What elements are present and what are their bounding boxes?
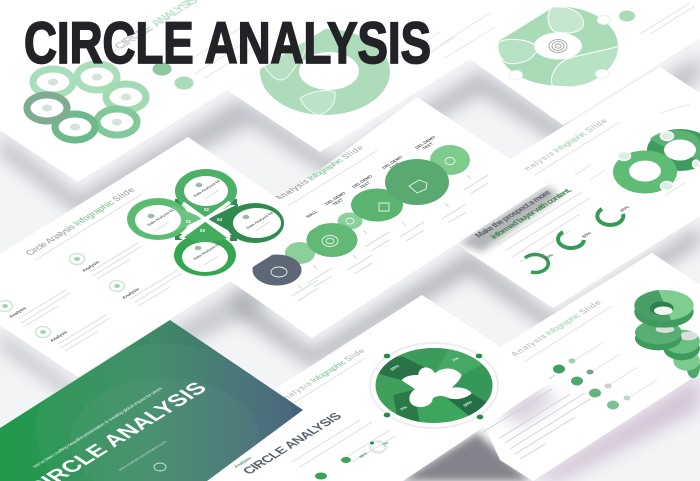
column labels: TEXT [331, 197, 345, 206]
numbers: 03 [200, 228, 206, 233]
donut stats [525, 209, 623, 273]
percentages: 30% [389, 364, 400, 372]
bold statement: informed buyer with content. [488, 187, 574, 240]
slide: clover [200, 295, 552, 481]
analysis list items [0, 243, 182, 351]
numbers: 02 [204, 207, 210, 212]
column labels [305, 135, 441, 219]
heading: nalysis [281, 380, 314, 401]
heading [272, 143, 366, 202]
teardrops [186, 198, 228, 217]
heading: Infographic [542, 311, 583, 337]
bold statement: Make the prospect a more [473, 189, 553, 239]
icon: fingerprint [549, 40, 567, 52]
shadow patch [495, 388, 560, 425]
heading [521, 117, 610, 172]
slide: four circles [0, 137, 318, 377]
ring chart [498, 6, 635, 87]
four circle diagram [127, 169, 284, 276]
small bullets [152, 62, 194, 90]
column labels: DEL DEMO [324, 191, 347, 206]
icons in rings [42, 74, 131, 130]
heading: Slide [342, 347, 367, 363]
heading: Infographic [308, 359, 348, 384]
heading: Infographic [305, 156, 345, 182]
stat labels [543, 205, 630, 261]
mini stats [315, 442, 386, 480]
ring chart [27, 64, 146, 140]
text lines [292, 420, 395, 467]
heading: nalysis [521, 150, 557, 172]
circle captions [147, 180, 275, 261]
heading: Analysis [508, 333, 549, 358]
percentages: 30% [462, 400, 473, 408]
ring dots [384, 354, 483, 419]
small label: Analysis [233, 456, 253, 469]
title: CIRCLE ANALYSIS [24, 11, 431, 76]
column labels: TEXT [358, 180, 372, 189]
leader lines and captions [298, 175, 471, 289]
percentages: 7% [451, 356, 460, 363]
numbered dots [553, 364, 619, 410]
3d disc stack [634, 290, 700, 378]
heading: Slide [339, 143, 366, 161]
circle captions: Data Analysis 02 [193, 180, 221, 198]
slide: clover: 7% [381, 441, 390, 447]
slide: top left six rings [0, 0, 372, 182]
donut chart [260, 29, 390, 115]
slide: right figure eight [416, 67, 700, 308]
heading: Slide [110, 186, 137, 203]
column labels: WALL [305, 209, 319, 219]
connectors [175, 199, 237, 241]
outer ring [370, 343, 498, 428]
heading: Slide [583, 117, 610, 134]
stat labels: 85% [543, 253, 554, 261]
stat labels: 85% [619, 205, 630, 213]
column labels: TEXT [421, 141, 435, 150]
circle captions: Data Analysis 04 [246, 211, 275, 230]
slide: centre overlapping circles [200, 97, 548, 338]
numbers: 01 [186, 219, 192, 224]
heading: circle analysis: CIRCLE [111, 23, 157, 52]
decorative circles [70, 378, 260, 481]
shadow from centre slide [458, 186, 560, 252]
heading: Infographic [71, 198, 117, 227]
slide: top center donut [227, 0, 565, 152]
numbers: 04 [217, 217, 223, 222]
column labels: DEL DEMO [351, 174, 374, 189]
cover slide [0, 320, 303, 481]
numbers [186, 207, 223, 233]
text lines [88, 22, 262, 78]
analysis list items: Analysis [49, 330, 69, 343]
heading [23, 186, 137, 257]
heading: Slide [576, 298, 604, 316]
column labels: TEXT [388, 161, 402, 170]
clover centre [402, 367, 472, 407]
cover icon [154, 463, 166, 471]
slide: top right segmented ring [440, 0, 700, 125]
heading: Circle Analysis [23, 223, 78, 257]
heading [281, 347, 367, 401]
circles [252, 145, 470, 286]
heading: Infographic [550, 130, 589, 154]
slide: bottom right disc stack [460, 253, 700, 481]
column labels: DEL DEMO [381, 155, 404, 170]
slide: clover: 85% [358, 451, 369, 459]
cover subline: www.example-presentation.com [118, 440, 168, 472]
heading [508, 298, 604, 358]
circle captions: Data Analysis 03 [193, 243, 221, 261]
circle icons [271, 158, 455, 277]
percentages: 7% [399, 405, 408, 412]
bold title: CIRCLE ANALYSIS [239, 410, 345, 477]
analysis list items: Analysis [8, 306, 28, 319]
icons [568, 358, 630, 400]
text lines [440, 3, 695, 34]
clover chart [376, 347, 497, 427]
figure eight rings [613, 129, 700, 194]
column labels: DEL DEMO [414, 135, 437, 150]
cover tagline: We've been crafting beautiful presentation & creating global impact for years [32, 386, 165, 469]
analysis list items: Analysis [121, 287, 141, 300]
analysis list items: Analysis [81, 260, 101, 273]
heading: circle analysis [111, 0, 202, 52]
percentages [389, 356, 473, 412]
heading: Analysis [272, 178, 311, 202]
stat labels: 85% [581, 231, 592, 239]
circle captions: Data Analysis 01 [147, 209, 175, 227]
text block [480, 375, 590, 459]
